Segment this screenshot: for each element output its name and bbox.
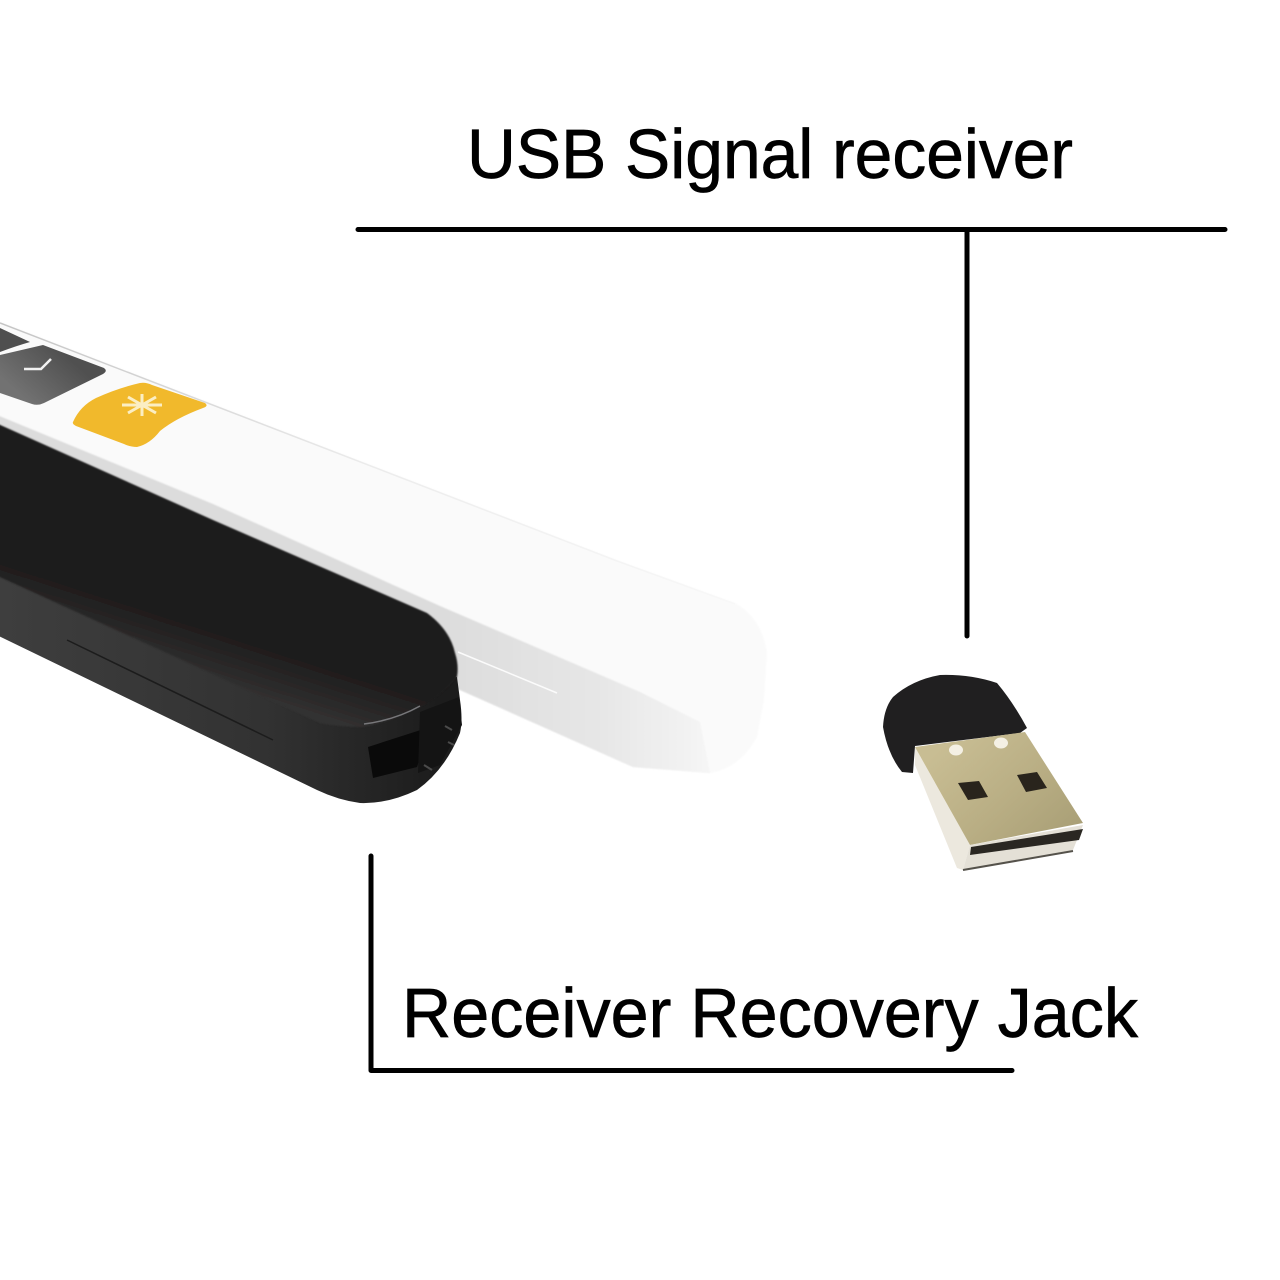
pointer side seam <box>458 652 557 693</box>
black body side <box>0 552 462 803</box>
white laser pointer <box>0 314 767 773</box>
USB receiver dongle <box>883 675 1083 870</box>
square hole right <box>1017 772 1047 792</box>
black laser pointer <box>0 416 462 803</box>
round contact right <box>994 738 1008 748</box>
pointer body <box>0 314 767 773</box>
upper grey key <box>0 328 30 352</box>
metal top plate <box>915 732 1083 845</box>
callout line: Receiver Recovery Jack <box>371 856 1012 1070</box>
metal side <box>915 747 970 870</box>
side groove line <box>67 640 273 740</box>
front opening <box>963 825 1083 870</box>
pointer top edge <box>0 323 735 604</box>
black top face <box>0 416 458 727</box>
dongle black cap <box>883 675 1027 773</box>
dark connector slot <box>970 829 1083 855</box>
receiver recovery jack slot <box>368 727 430 778</box>
icon: asterisk <box>122 394 162 416</box>
title: USB Signal receiver: USB Signal receiver <box>467 115 1073 193</box>
face edge highlight <box>364 706 420 724</box>
callout line: USB Signal receiver <box>358 230 1225 636</box>
jack end detail <box>418 697 462 773</box>
icon: chevron down <box>24 359 51 369</box>
square hole left <box>958 781 988 800</box>
lower grey key <box>0 345 106 405</box>
round contact left <box>949 744 963 756</box>
jack end bumps <box>424 726 454 770</box>
pointer lower bevel and side <box>0 408 710 773</box>
front plate edge <box>963 851 1073 870</box>
yellow laser key <box>73 383 207 447</box>
label: Receiver Recovery Jack: Receiver Recovery Jack <box>402 974 1139 1052</box>
